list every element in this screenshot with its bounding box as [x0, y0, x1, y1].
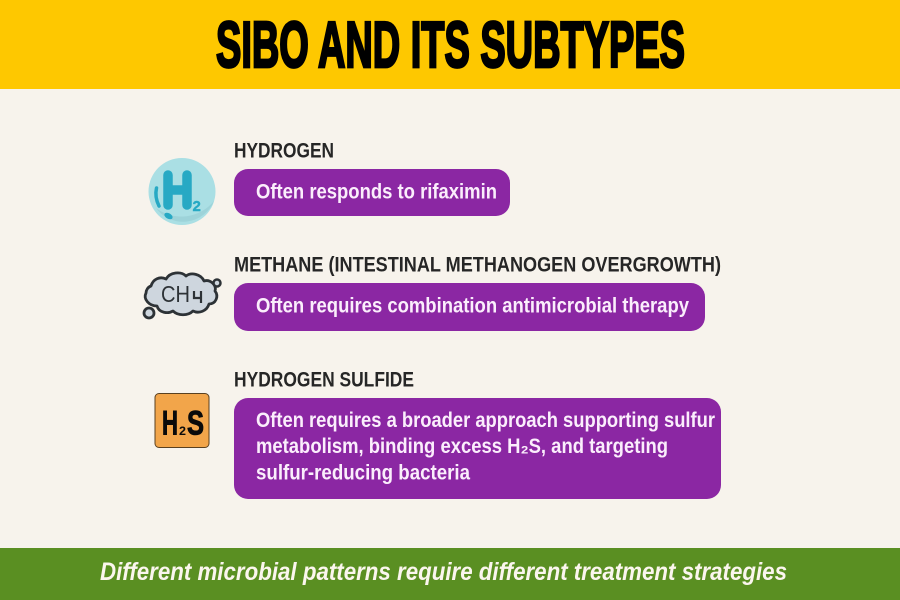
footer text: Different microbial patterns require different treatment strategies [100, 558, 787, 586]
section: hydrogen sulfide [155, 368, 721, 499]
icon: H2S tile: S [187, 404, 204, 442]
icon: H2S tile: 2 [179, 424, 186, 438]
heading: methane: METHANE (INTESTINAL METHANOGEN OVERGROWTH) [234, 253, 721, 276]
section: hydrogen [148, 139, 510, 225]
header banner [0, 0, 900, 89]
section: methane [144, 253, 721, 331]
icon: methane cloud: CH [161, 281, 190, 307]
footer banner [0, 548, 900, 600]
heading: hydrogen sulfide: HYDROGEN SULFIDE [234, 368, 414, 391]
pill: broader approach: metabolism, binding excess H₂S, and targeting [256, 434, 668, 458]
pill: broader approach [234, 398, 721, 499]
icon: hydrogen molecule: 2 [192, 198, 201, 215]
icon: methane cloud [144, 273, 220, 318]
pill: rifaximin [234, 169, 510, 216]
pill: combination therapy: Often requires combination antimicrobial therapy [256, 294, 689, 318]
icon: H2S tile [155, 394, 209, 448]
pill: broader approach: Often requires a broader approach supporting sulfur [256, 408, 716, 432]
icon: H2S tile: H [162, 404, 178, 442]
heading: hydrogen: HYDROGEN [234, 139, 334, 162]
pill: combination therapy [234, 283, 705, 331]
pill: rifaximin: Often responds to rifaximin [256, 179, 497, 203]
icon: hydrogen molecule [148, 158, 216, 225]
pill: broader approach: sulfur-reducing bacteria [256, 460, 471, 484]
